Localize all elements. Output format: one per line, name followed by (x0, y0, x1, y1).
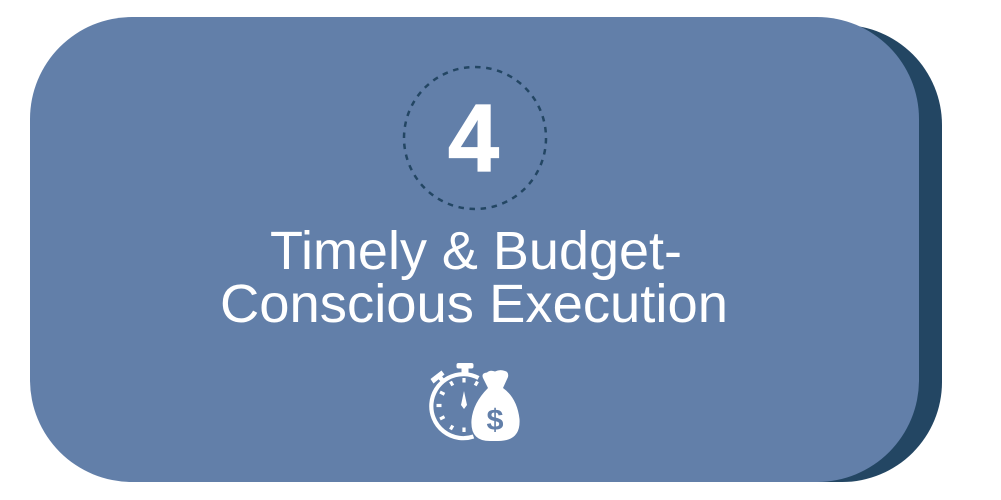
heading line 2: Conscious Execution (220, 274, 728, 334)
dollar sign: $ (486, 404, 504, 437)
dashed number circle (404, 67, 546, 209)
heading line 1: Timely & Budget- (270, 221, 682, 281)
icon: stopwatch (430, 363, 478, 438)
step number: 4 (448, 85, 499, 192)
heading (220, 221, 728, 334)
icon: stopwatch and money bag (430, 363, 520, 441)
panel: dark shadow backing (500, 25, 942, 482)
